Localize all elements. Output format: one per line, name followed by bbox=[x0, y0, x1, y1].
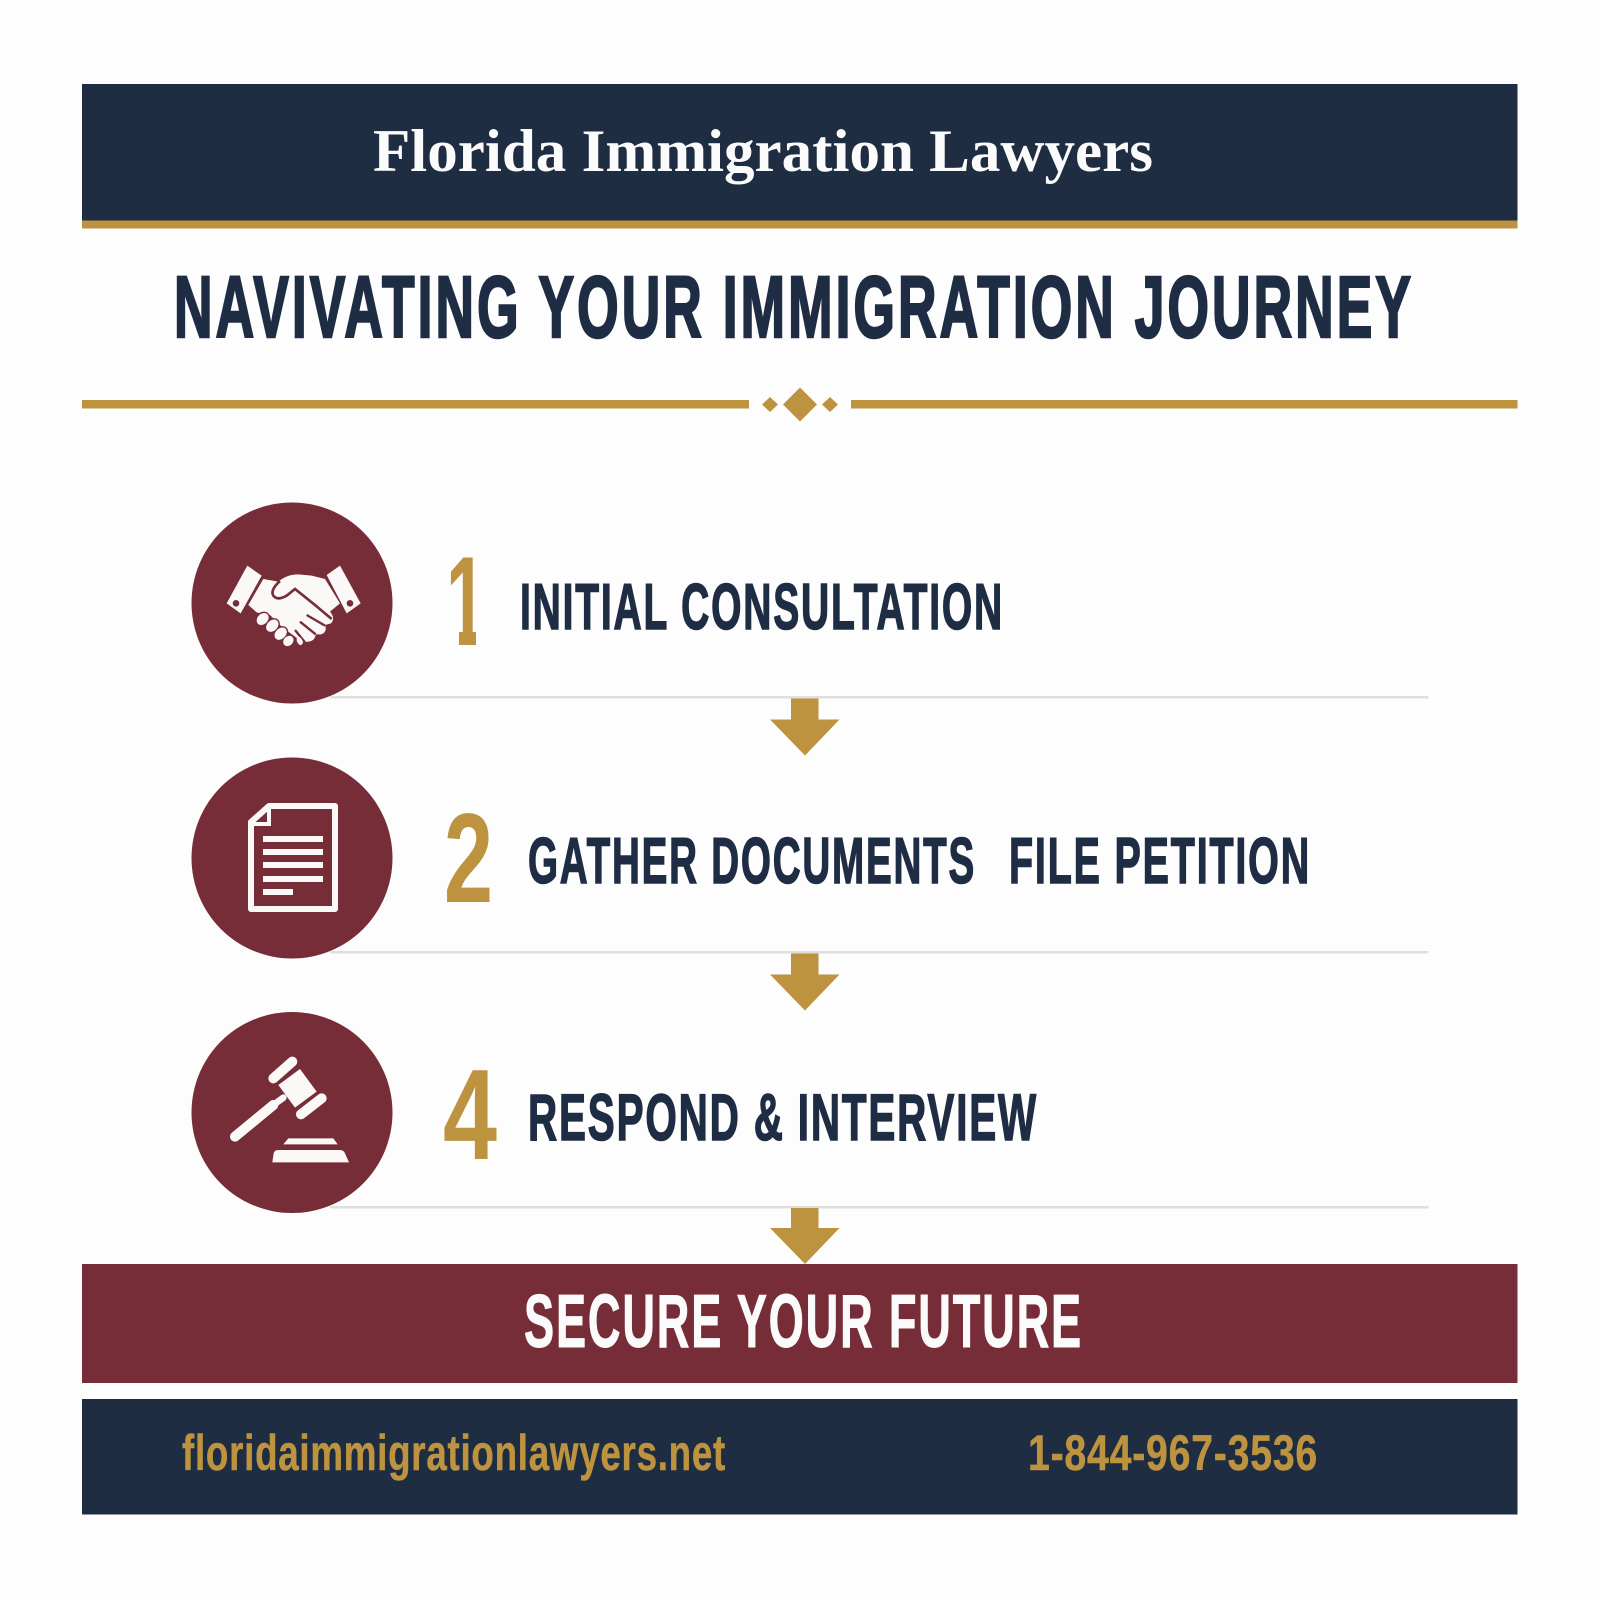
icon: handshake bbox=[227, 566, 361, 650]
step 1 bbox=[192, 502, 1428, 704]
step 1 circle bbox=[192, 502, 392, 704]
step 1 label: INITIAL CONSULTATION bbox=[520, 570, 1004, 643]
step 1 number: 1 bbox=[446, 530, 486, 672]
step 2 label: FILE PETITION bbox=[1009, 824, 1311, 897]
footer banner bbox=[82, 1399, 1518, 1514]
step 3 label: RESPOND & INTERVIEW bbox=[528, 1080, 1038, 1154]
arrow 3 bbox=[770, 1208, 840, 1264]
call to action text: SECURE YOUR FUTURE bbox=[524, 1279, 1083, 1363]
step 2 circle bbox=[192, 758, 392, 958]
step 3 bbox=[192, 1012, 1428, 1213]
step 2 bbox=[192, 758, 1428, 958]
icon: gavel bbox=[235, 1062, 349, 1162]
header firm name: Florida Immigration Lawyers bbox=[373, 118, 1153, 184]
header banner bbox=[82, 84, 1518, 228]
call to action banner bbox=[82, 1264, 1518, 1383]
footer phone: 1-844-967-3536 bbox=[1028, 1425, 1318, 1481]
step 2 label: GATHER DOCUMENTS bbox=[528, 824, 976, 897]
step 3 circle bbox=[192, 1012, 392, 1213]
arrow 1 bbox=[770, 698, 840, 756]
step 2 number: 2 bbox=[444, 787, 493, 929]
icon: document bbox=[251, 806, 335, 909]
footer website: floridaimmigrationlawyers.net bbox=[182, 1425, 726, 1481]
title divider with diamonds bbox=[82, 388, 1518, 422]
step 3 number: 4 bbox=[443, 1043, 497, 1187]
arrow 2 bbox=[770, 954, 840, 1010]
